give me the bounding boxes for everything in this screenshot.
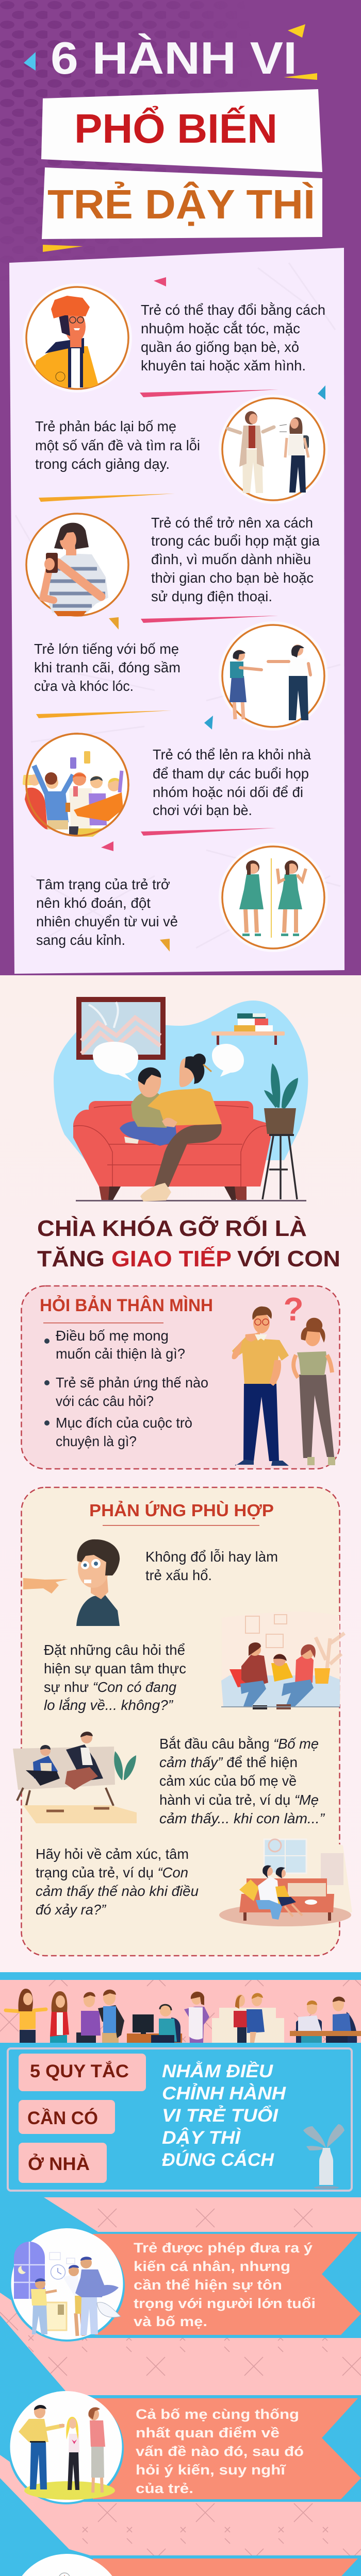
behaviour 3: text: thời gian cho bạn bè hoặc xyxy=(151,570,314,586)
rule 3 ribbon xyxy=(93,2558,358,2576)
headline pill: ở nhà xyxy=(19,2143,107,2183)
headline: purpose statement xyxy=(162,2061,286,2170)
behaviour 3: text xyxy=(151,515,320,604)
behaviour 2: text: một số vấn đề và tìm ra lỗi xyxy=(35,437,200,453)
rule 2 xyxy=(8,2391,361,2504)
heading: key is communication: CHÌA KHÓA GỠ RỐI LÀ xyxy=(37,1215,307,1241)
text: start with parent feelings: cảm xúc của bố mẹ về xyxy=(159,1773,297,1789)
behaviour 3: illustration, teen on phone xyxy=(26,514,128,616)
behaviour 1: text: nhuộm hoặc cắt tóc, mặc xyxy=(141,320,300,336)
behaviour 2: text: trong cách giảng dạy. xyxy=(35,456,170,472)
icon: question mark: ? xyxy=(283,1291,304,1328)
section: purple background xyxy=(0,0,361,975)
behaviour 3: text: đình, vì muốn dành nhiều xyxy=(151,551,311,567)
behaviour 3: text: trong các buổi họp mặt gia xyxy=(151,533,320,549)
rule 3 xyxy=(9,2554,358,2576)
headline: purpose statement: CHỈNH HÀNH xyxy=(162,2083,286,2104)
illustration: mother and daughter on beige sofa xyxy=(13,1732,137,1823)
section: five rules background xyxy=(0,1972,361,2576)
question list: muốn cải thiện là gì? xyxy=(56,1346,185,1362)
title banner: phổ biến xyxy=(41,89,322,172)
illustration: mother and son talking on sofa xyxy=(54,999,308,1201)
illustration: mother and daughter on orange sofa xyxy=(218,1839,352,1926)
headline: purpose statement: ĐÚNG CÁCH xyxy=(162,2149,274,2170)
rule 1 xyxy=(9,2228,361,2342)
question list: với các câu hỏi? xyxy=(56,1393,154,1409)
pink ribbons background with cross pattern xyxy=(0,2197,361,2576)
icon: vase with leaves xyxy=(303,2124,344,2189)
question list xyxy=(44,1328,208,1449)
behaviour 5: text: Trẻ có thể lẻn ra khỏi nhà xyxy=(153,747,311,762)
text: ask caring questions: Đặt những câu hỏi thể xyxy=(44,1642,185,1658)
rule 1 text: trọng với người lớn tuổi xyxy=(134,2296,316,2311)
text: do not blame xyxy=(145,1549,278,1583)
behaviour 5: text: chơi với bạn bè. xyxy=(153,802,252,818)
accent: pink stroke and triangle xyxy=(101,828,276,851)
text: start with parent feelings: hành vi của trẻ, ví dụ “Mẹ xyxy=(159,1792,319,1808)
rule 2 ribbon xyxy=(93,2398,361,2499)
behaviour 6: illustration, mood swings xyxy=(219,843,328,952)
behaviour 6: text: nhiên chuyển từ vui vẻ xyxy=(36,913,178,929)
rule 2 text: Cả bố mẹ cùng thống xyxy=(136,2406,299,2422)
title accent triangles xyxy=(24,24,317,252)
rule 1 ribbon xyxy=(93,2234,361,2335)
behaviour 5: text: nhóm hoặc nói dối để đi xyxy=(153,784,303,800)
behaviour 4: illustration, shouting xyxy=(219,621,328,731)
text: ask about feelings: Hãy hỏi về cảm xúc, tâm xyxy=(36,1846,189,1862)
title banner: phổ biến: PHỔ BIẾN xyxy=(74,106,277,151)
headline: purpose statement: VI TRẺ TUỔI xyxy=(162,2105,278,2126)
headline pill: 5 quy tắc xyxy=(19,2054,146,2091)
behaviour 2: text: Trẻ phản bác lại bố mẹ xyxy=(35,418,176,434)
behaviour 6: text: Tâm trạng của trẻ trở xyxy=(36,876,170,892)
accent: pink stroke and orange triangle xyxy=(109,616,278,630)
illustration: family on sofa xyxy=(221,1612,344,1709)
title banner: trẻ dậy thì xyxy=(42,167,322,239)
rule 1 text: cần thể hiện sự tôn xyxy=(134,2277,282,2293)
behaviour 3: text: sử dụng điện thoại. xyxy=(151,588,272,604)
behaviour 3: text: Trẻ có thể trở nên xa cách xyxy=(151,515,313,531)
accent: pink stroke and blue triangle xyxy=(140,385,325,400)
text: ask about feelings: đó xảy ra?” xyxy=(36,1902,107,1918)
headline pill: ở nhà: Ở NHÀ xyxy=(28,2154,90,2174)
title: 6 hành vi: 6 HÀNH VI xyxy=(51,32,297,83)
question list: Trẻ sẽ phản ứng thế nào xyxy=(56,1375,208,1391)
text: ask about feelings: cảm thấy thế nào khi điều xyxy=(36,1883,199,1899)
rule 2 text: của trẻ. xyxy=(136,2481,193,2496)
behaviour 1: text xyxy=(141,302,325,374)
rule 1 illustration: family discussion xyxy=(9,2228,125,2342)
behaviour 1: text: quần áo giống bạn bè, xỏ xyxy=(141,339,299,355)
behaviour 1: illustration, dyed hair teen xyxy=(23,283,132,393)
headline pill: cần có xyxy=(19,2100,115,2134)
illustration: pointed-at boy xyxy=(23,1539,120,1626)
behaviour 2: text xyxy=(35,418,200,472)
text: do not blame: trẻ xấu hổ. xyxy=(145,1567,212,1583)
headline: purpose statement: DẬY THÌ xyxy=(162,2127,241,2148)
text: ask caring questions: hiện sự quan tâm thực xyxy=(44,1660,186,1676)
rule 3 illustration: discipline at door xyxy=(9,2554,125,2576)
panel: six behaviours xyxy=(9,248,344,974)
behaviour 5: text xyxy=(153,747,311,818)
behaviour 5: text: để tham dự các buổi họp xyxy=(153,766,309,782)
rule 1 text: Trẻ được phép đưa ra ý xyxy=(134,2240,313,2256)
text: start with parent feelings: Bắt đầu câu bằng “Bố mẹ xyxy=(159,1736,319,1752)
text: ask about feelings: trạng của trẻ, ví dụ “Con xyxy=(36,1865,188,1880)
behaviour 2: illustration, arguing with mother xyxy=(219,395,328,504)
headline pill: cần có: CẦN CÓ xyxy=(27,2108,98,2128)
panel: ask yourself xyxy=(22,1286,339,1469)
rule 2 text: vấn đề nào đó, sau đó xyxy=(136,2444,304,2459)
text: ask caring questions: lo lắng về... không?” xyxy=(44,1697,174,1713)
accent: orange triangle xyxy=(160,939,170,952)
illustration: row of families xyxy=(6,1989,361,2043)
rule 2 text xyxy=(136,2406,304,2496)
text: start with parent feelings: cảm thấy” để thể hiện xyxy=(159,1754,298,1770)
behaviour 6: text xyxy=(36,876,178,948)
panel: five rules headline xyxy=(8,2048,352,2191)
text: start with parent feelings: cảm thấy... khi con làm...” xyxy=(159,1810,325,1826)
panel: appropriate responses xyxy=(13,1487,352,1956)
text: ask caring questions xyxy=(44,1642,186,1713)
rule 1 text: và bố mẹ. xyxy=(134,2314,207,2329)
rule 1 text xyxy=(134,2240,316,2329)
heading: key is communication: VỚI CON xyxy=(237,1246,340,1272)
rule 2 text: nhất quan điểm về xyxy=(136,2425,280,2441)
rule 2 illustration: parents and daughter xyxy=(8,2391,124,2504)
heading: key is communication: TĂNG xyxy=(37,1246,105,1272)
behaviour 1: text: Trẻ có thể thay đổi bằng cách xyxy=(141,302,325,318)
accent: orange stroke and blue triangle xyxy=(36,710,213,730)
text: ask caring questions: sự như “Con có đang xyxy=(44,1679,176,1695)
question list: Điều bố mẹ mong xyxy=(56,1328,169,1344)
behaviour 4: text xyxy=(34,641,180,694)
section: communication background xyxy=(0,975,361,1972)
accent: orange stroke xyxy=(39,494,175,502)
text: start with parent feelings xyxy=(159,1736,325,1826)
title banner: trẻ dậy thì: TRẺ DẬY THÌ xyxy=(47,181,315,227)
panel heading: ask yourself: HỎI BẢN THÂN MÌNH xyxy=(40,1296,213,1315)
illustration: thinking parents xyxy=(232,1291,335,1466)
behaviour 5: illustration, friends party xyxy=(22,734,128,837)
question list: chuyện là gì? xyxy=(56,1433,137,1449)
panel heading: appropriate responses: PHẢN ỨNG PHÙ HỢP xyxy=(89,1501,274,1520)
behaviour 6: text: sang cáu kỉnh. xyxy=(36,932,125,948)
rule 2 text: hỏi ý kiến, suy nghĩ xyxy=(136,2462,286,2478)
behaviour 4: text: khi tranh cãi, đóng sầm xyxy=(34,659,180,675)
text: do not blame: Không đổ lỗi hay làm xyxy=(145,1549,278,1565)
heading: key is communication: GIAO TIẾP xyxy=(111,1246,232,1272)
behaviour 1: text: khuyên tai hoặc xăm hình. xyxy=(141,358,306,374)
behaviour 6: text: nên khó đoán, đột xyxy=(36,895,151,911)
heading: key is communication xyxy=(37,1215,340,1272)
headline: purpose statement: NHẰM ĐIỀU xyxy=(162,2061,273,2081)
headline pill: 5 quy tắc: 5 QUY TẮC xyxy=(30,2061,129,2081)
question list: Mục đích của cuộc trò xyxy=(56,1415,192,1431)
accent: pink triangle xyxy=(154,277,166,286)
text: ask about feelings xyxy=(36,1846,199,1918)
rule 1 text: kiến cá nhân, nhưng xyxy=(134,2259,290,2274)
behaviour 4: text: Trẻ lớn tiếng với bố mẹ xyxy=(34,641,179,657)
behaviour 4: text: cửa và khóc lóc. xyxy=(34,678,134,694)
